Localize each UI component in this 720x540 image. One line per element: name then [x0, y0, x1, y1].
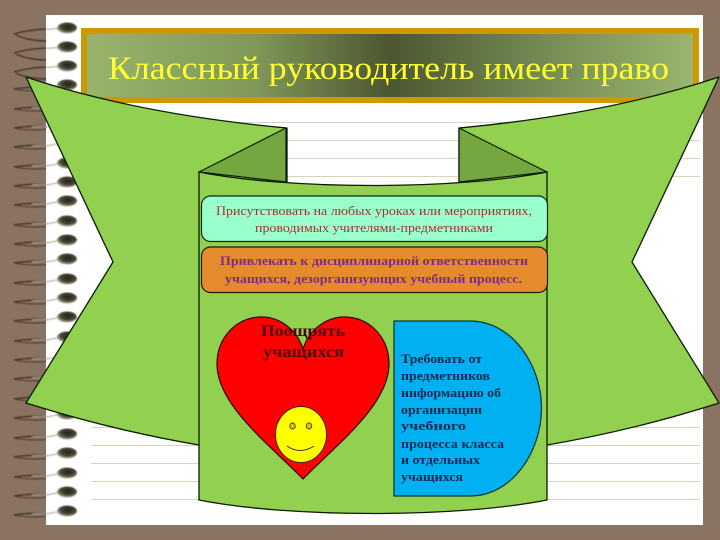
heart: encourage students: [217, 317, 389, 479]
ribbon: central panel: [199, 172, 547, 514]
orange box: disciplinary responsibility: Привлекать к дисциплинарной ответственности: [220, 253, 529, 268]
mint box: attend lessons: проводимых учителями-предметниками: [255, 220, 493, 235]
orange box: disciplinary responsibility: учащихся, дезорганизующих учебный процесс.: [225, 271, 522, 286]
mint box: attend lessons: Присутствовать на любых уроках или мероприятиях,: [216, 203, 532, 218]
icon: smiley face: [276, 406, 326, 462]
spiral binding: [14, 22, 77, 517]
blue panel: require information: предметников: [401, 368, 490, 383]
blue panel: require information: информацию об: [401, 385, 502, 400]
title banner: [84, 31, 696, 100]
orange box: disciplinary responsibility: [202, 247, 548, 292]
ribbon: left fold: [199, 128, 286, 182]
blue panel: require information: организации: [401, 402, 483, 417]
blue panel: require information: учебного: [401, 418, 466, 433]
heart: encourage students: Поощрять: [261, 323, 346, 340]
heart: encourage students: учащихся: [263, 344, 344, 361]
blue panel: require information: процесса класса: [401, 436, 505, 451]
blue panel: require information: Требовать от: [401, 351, 483, 366]
blue panel: require information: учащихся: [401, 469, 463, 484]
ribbon: right wing: [459, 77, 719, 445]
blue panel: require information: и отдельных: [401, 452, 481, 467]
title banner: Классный руководитель имеет право: [108, 51, 669, 87]
mint box: attend lessons: [202, 196, 548, 242]
ribbon: right fold: [459, 128, 547, 182]
blue panel: require information: [394, 321, 542, 496]
ribbon: left wing: [26, 77, 287, 445]
